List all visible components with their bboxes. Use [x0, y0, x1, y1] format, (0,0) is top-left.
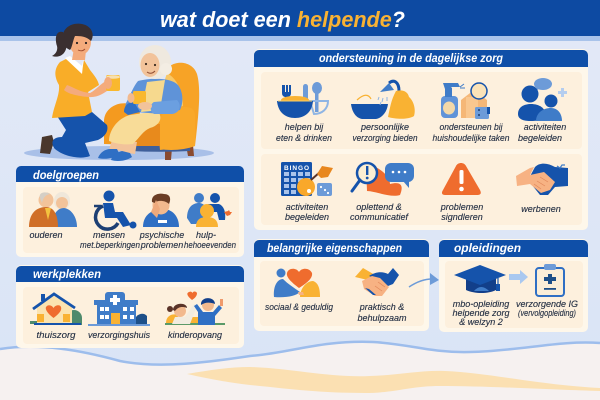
- label: mbo-opleiding helpende zorg en welzijn 2: mbo-opleiding: [453, 299, 509, 309]
- icon: bingo: [281, 162, 333, 199]
- icon: eten en drinken: [277, 82, 328, 118]
- label: activiteiten begeleiden: activiteiten: [524, 122, 566, 132]
- icon: sociaal en geduldig: [274, 268, 320, 297]
- oudere: [98, 45, 182, 161]
- label: verzorgende IG (vervolgopleiding): verzorgende IG: [516, 299, 578, 309]
- label: praktisch en behulpzaam: [357, 302, 407, 323]
- icon: persoonlijke verzorging: [351, 81, 415, 119]
- label: verzorgingshuis: verzorgingshuis: [88, 330, 150, 340]
- icon: klembord met kruis: [536, 264, 564, 296]
- label: ouderen: ouderen: [29, 230, 63, 240]
- label: mbo-opleiding helpende zorg en welzijn 2: [452, 299, 510, 327]
- panel: ondersteuning in de dagelijkse zorg: [254, 49, 588, 230]
- label: oplettend en communicatief: oplettend &: [356, 202, 402, 212]
- icon: oplettend en communicatief: [352, 163, 414, 196]
- heading: ondersteuning: ondersteuning in de dagelijkse zorg: [319, 53, 503, 65]
- illustration: helpende geeft oudere een kop: [24, 24, 214, 161]
- label: praktisch en behulpzaam: behulpzaam: [357, 313, 407, 323]
- arrow: naar opleidingen: [409, 273, 439, 287]
- label: verzorgende IG (vervolgopleiding): [516, 299, 578, 318]
- label: hulpbehoevenden: [184, 230, 236, 250]
- arrow: naar vervolgopleiding: [509, 270, 528, 284]
- label: werbenen: werbenen: [521, 204, 561, 214]
- label: helpen bij eten en drinken: eten & drinken: [276, 133, 332, 143]
- label: hulpbehoevenden: hehoeevenden: [184, 240, 236, 250]
- icon: hulpbehoevenden: [187, 193, 232, 227]
- label: helpen bij eten en drinken: helpen bij: [285, 122, 324, 132]
- label: activiteiten begeleiden: begeleiden: [518, 133, 562, 143]
- label: mbo-opleiding helpende zorg en welzijn 2: & welzyn 2: [459, 317, 503, 327]
- header band: [0, 0, 600, 41]
- icon: huis: [30, 294, 82, 325]
- label: oplettend en communicatief: [350, 202, 410, 222]
- label: ondersteunen bij huishoudelijke taken: ondersteunen bij: [440, 122, 503, 132]
- heading: werkplekken: werkplekken: [33, 269, 101, 281]
- icon: praktisch en behulpzaam: [355, 268, 399, 296]
- label: mensen met beperkingen: [80, 230, 140, 250]
- icon: handdruk: [516, 164, 568, 195]
- bottom waves: [0, 342, 600, 400]
- icon: waarschuwing: [442, 163, 481, 195]
- label: persoonlijke verzorging bieden: verzorging bieden: [352, 133, 418, 143]
- icon: huishoudelijke taken: [441, 83, 490, 119]
- label: activiteiten begeleiden: [518, 122, 566, 143]
- icon: bingo: BINGO: [284, 165, 309, 172]
- panel: belangrijke eigenschappen: [254, 239, 429, 331]
- label: hulpbehoevenden: hulp-: [196, 230, 216, 240]
- icon: verzorgingshuis: [88, 292, 150, 326]
- helpende: [40, 24, 120, 158]
- label: psychische problemen: problemen: [140, 240, 183, 250]
- label: psychische problemen: [139, 230, 184, 250]
- icon: psychische problemen: [143, 194, 179, 227]
- label: problemen signaleren: [440, 202, 483, 222]
- icon: rolstoel: [94, 190, 136, 229]
- heading: doelgroepen: doelgroepen: [33, 170, 99, 182]
- heading: opleidingen: opleidingen: [454, 243, 521, 255]
- icon: kinderopvang: [165, 292, 225, 325]
- label: sociaal en geduldig: sociaal & geduldig: [265, 302, 333, 312]
- label: problemen signaleren: problemen: [440, 202, 483, 212]
- label: helpen bij eten en drinken: [276, 122, 332, 143]
- label: mensen met beperkingen: met.beperkingen: [80, 240, 140, 250]
- armchair: [104, 63, 199, 160]
- label: praktisch en behulpzaam: praktisch &: [359, 302, 404, 312]
- label: oplettend en communicatief: communicatief: [350, 212, 410, 222]
- panel: doelgroepen: [16, 166, 244, 257]
- title: wat doet een helpende?: [160, 7, 405, 32]
- label: mensen met beperkingen: mensen: [93, 230, 125, 240]
- label: ondersteunen bij huishoudelijke taken: huishoudelijke taken: [432, 133, 510, 143]
- icon: activiteiten begeleiden: [518, 78, 567, 121]
- heading: belangrijke eigenschappen: belangrijke eigenschappen: [267, 243, 402, 255]
- label: problemen signaleren: signdleren: [441, 212, 483, 222]
- label: mbo-opleiding helpende zorg en welzijn 2: helpende zorg: [452, 308, 510, 318]
- label: activiteiten begeleiden (rij 2): activiteiten: [286, 202, 328, 212]
- label: ondersteunen bij huishoudelijke taken: [432, 122, 510, 143]
- label: activiteiten begeleiden (rij 2): [285, 202, 329, 222]
- label: kinderopvang: kinderopvang: [168, 330, 222, 340]
- label: verzorgende IG (vervolgopleiding): (vervolgopleiding): [518, 308, 576, 318]
- label: persoonlijke verzorging bieden: [352, 122, 418, 143]
- panel: opleidingen: [439, 239, 588, 332]
- label: thuiszorg: thuiszorg: [36, 330, 76, 340]
- icon: ouderen: [29, 192, 77, 227]
- label: psychische problemen: psychische: [139, 230, 184, 240]
- label: activiteiten begeleiden (rij 2): begeleiden: [285, 212, 329, 222]
- icon: afstudeerhoed: [454, 265, 506, 293]
- label: persoonlijke verzorging bieden: persoonlijke: [360, 122, 409, 132]
- panel: werkplekken: [16, 265, 244, 348]
